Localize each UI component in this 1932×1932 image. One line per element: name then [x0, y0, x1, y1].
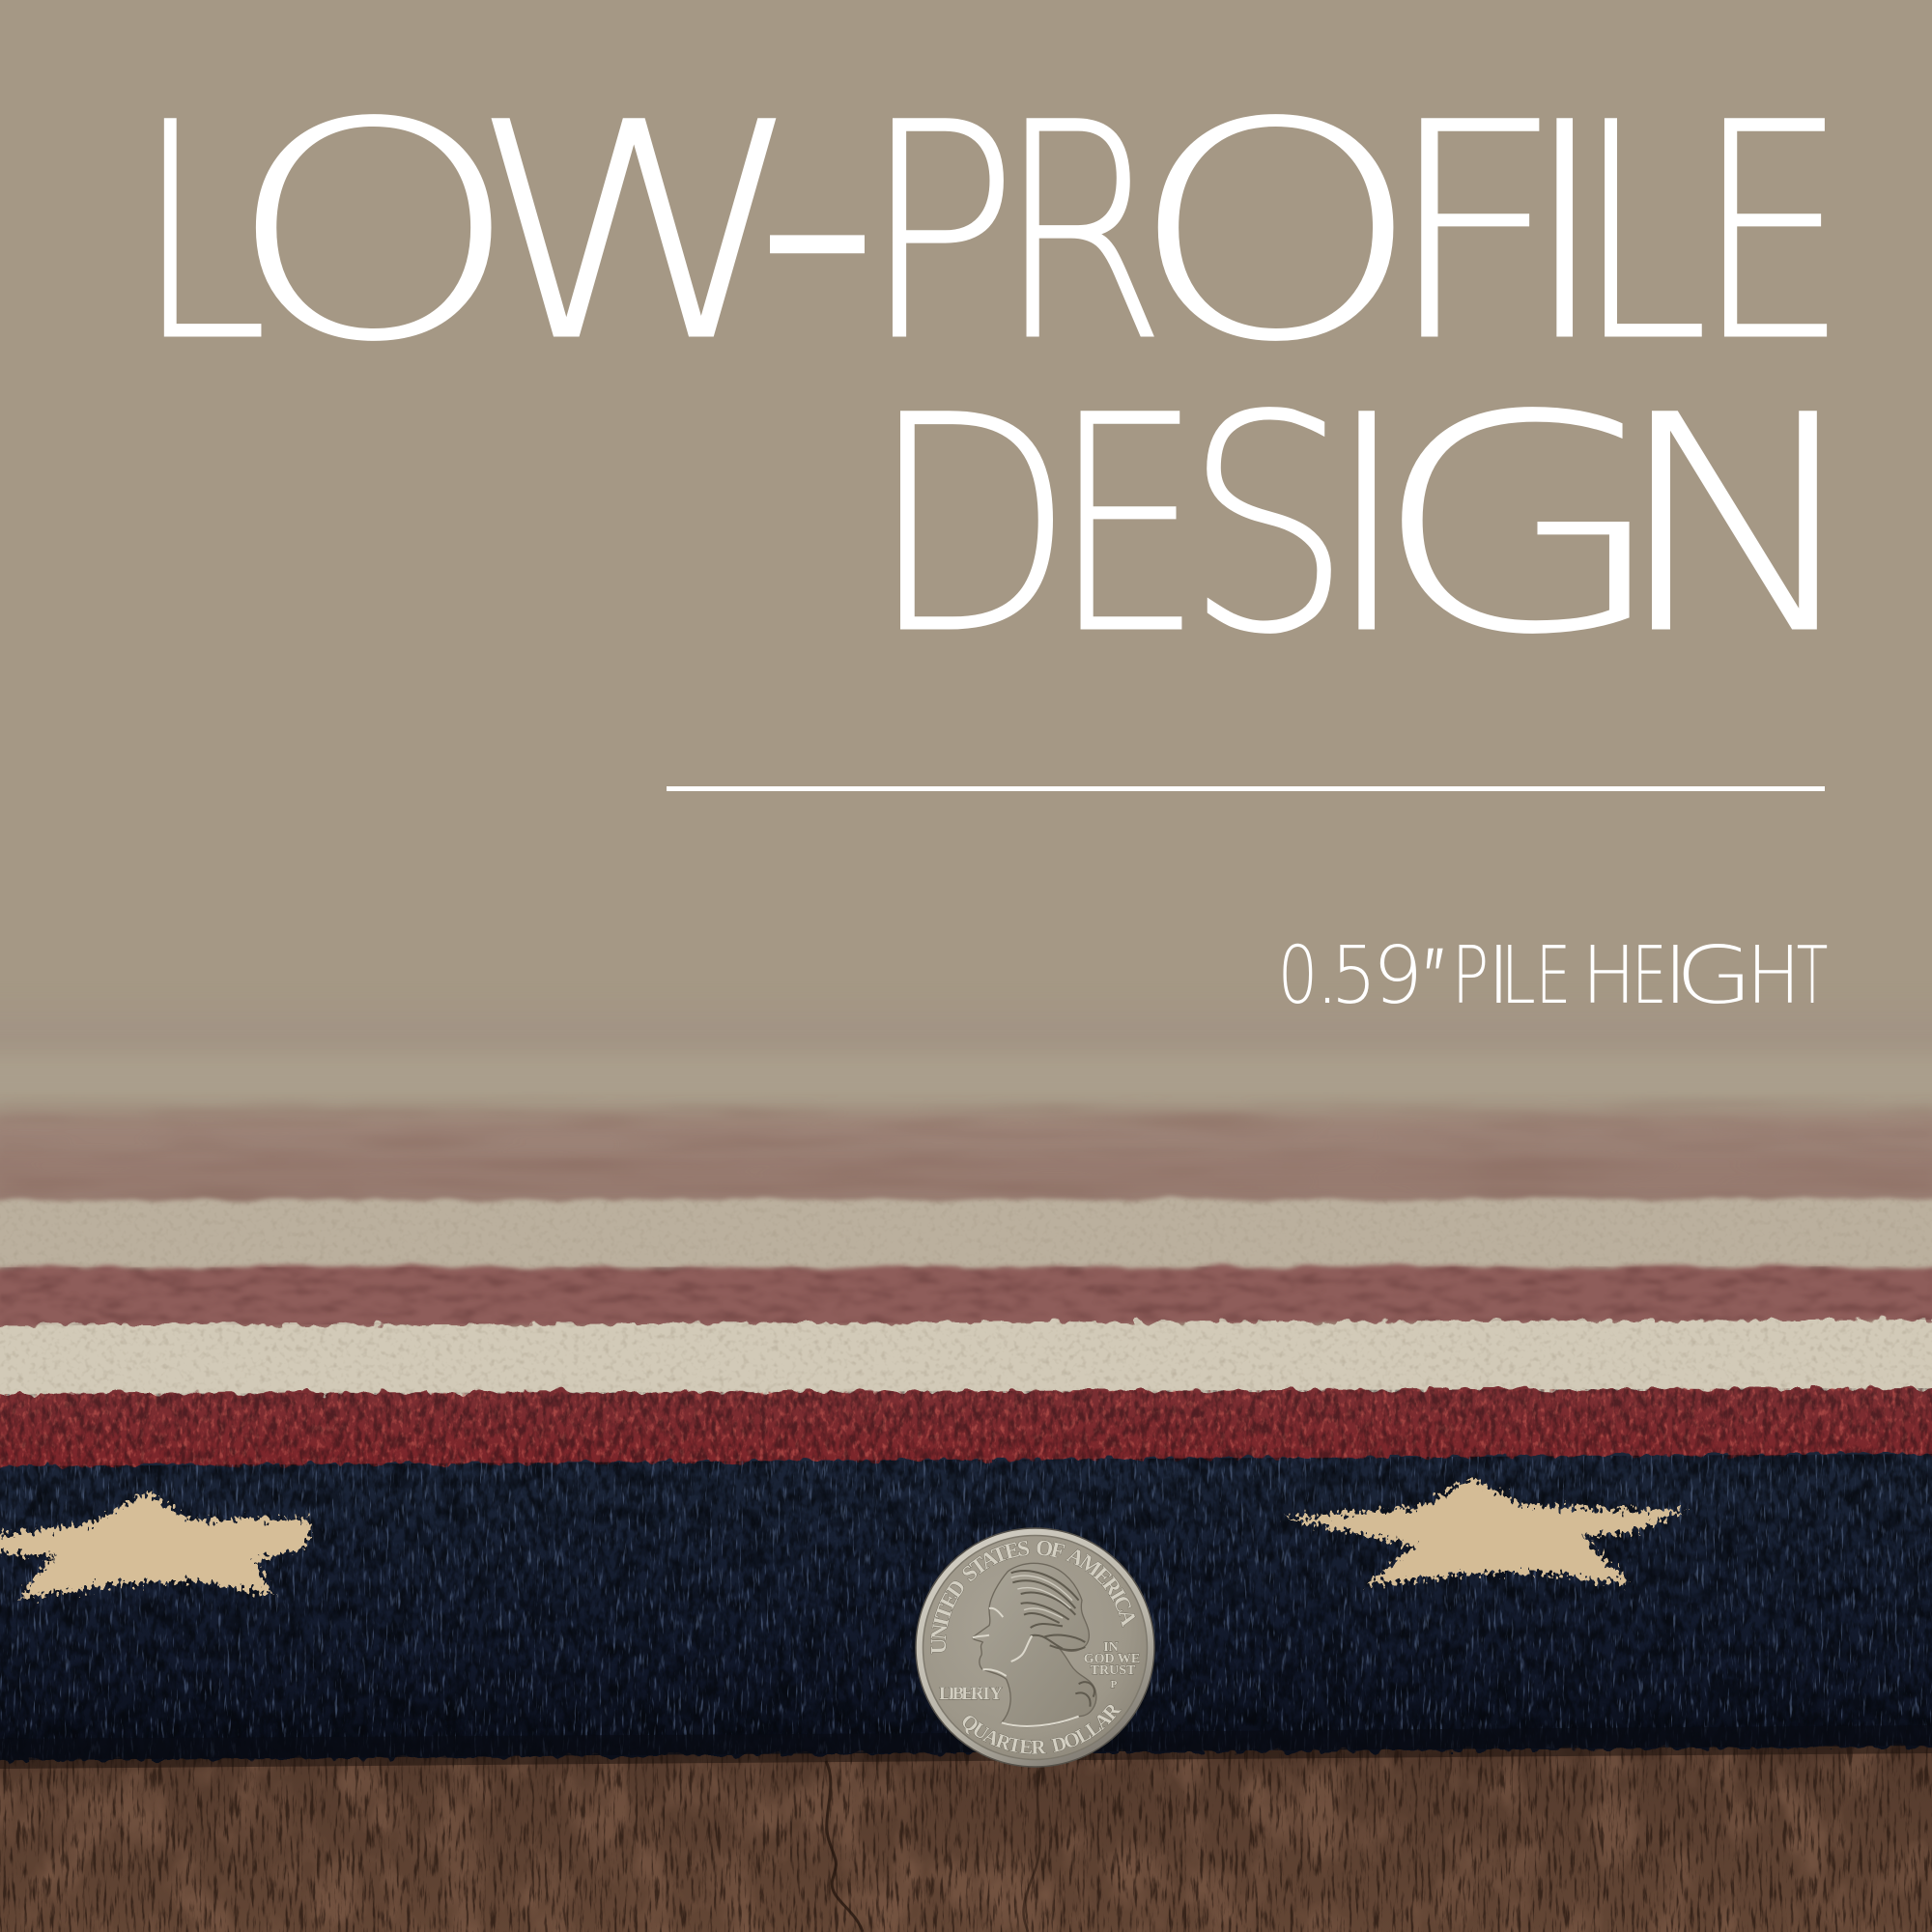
coin text motto: P: [1111, 1679, 1118, 1690]
title line 1: E: [1695, 60, 1848, 408]
rug photo: [0, 1014, 1932, 1932]
title line 1: O: [1128, 59, 1423, 407]
pile height caption: 0: [1278, 929, 1318, 1022]
coin text motto: IN: [1103, 1640, 1119, 1655]
coin rim: [916, 1528, 1154, 1767]
pile height caption: E: [1536, 929, 1571, 1022]
pile height caption: [1278, 929, 1828, 1022]
cream stripe near: [0, 1320, 1932, 1397]
title line 2: N: [1610, 352, 1869, 699]
pile height caption: .: [1315, 930, 1340, 1022]
title line 2: S: [1183, 353, 1352, 699]
title line 1: F: [1383, 60, 1565, 408]
coin text motto: TRUST: [1091, 1663, 1136, 1678]
title line 1: P: [861, 59, 1019, 407]
pile height caption: E: [1632, 929, 1667, 1022]
rug bottom edge: [0, 1725, 1932, 1760]
title line 2: D: [868, 353, 1075, 700]
title line 2: I: [1322, 352, 1411, 699]
red stripe: [0, 1388, 1932, 1472]
stripe textures: [0, 1193, 1932, 1478]
pile height caption: H: [1747, 930, 1801, 1022]
pile height caption: I: [1487, 930, 1511, 1022]
title line 1: R: [997, 59, 1167, 407]
title line 1: [135, 0, 1848, 461]
star left: [0, 1492, 309, 1599]
quarter coin: [915, 1527, 1155, 1768]
title line 1: W: [469, 59, 808, 407]
pile height caption: I: [1663, 930, 1688, 1022]
title line 2: G: [1370, 353, 1670, 699]
title line 1: O: [226, 59, 522, 407]
coin text bottom: QUARTER DOLLAR: [962, 1704, 1122, 1754]
title line 2: E: [1052, 352, 1203, 699]
title line 2: [868, 352, 1869, 700]
blurred far stripes: [0, 1105, 1932, 1204]
pile height caption: 5: [1331, 930, 1377, 1022]
pile height caption: G: [1675, 930, 1753, 1022]
divider line: [667, 786, 1825, 791]
coin text liberty: LIBERTY: [939, 1684, 1003, 1704]
star right: [1283, 1477, 1687, 1584]
wood floor: [0, 1739, 1932, 1932]
coin text motto: [1084, 1640, 1140, 1690]
navy rug field: [0, 1454, 1932, 1761]
title line 1: I: [1520, 59, 1609, 407]
title: [135, 0, 1869, 700]
title line 1: L: [135, 59, 269, 407]
pile height caption: H: [1582, 930, 1635, 1022]
navy pile texture: [0, 1449, 1932, 1768]
coin text top: UNITED STATES OF AMERICA: [930, 1540, 1136, 1654]
washington portrait: [973, 1563, 1096, 1727]
rose stripe: [0, 1266, 1932, 1329]
pile height caption: L: [1500, 929, 1536, 1022]
pile height caption: ″: [1424, 929, 1444, 1022]
cream stripe far: [0, 1199, 1932, 1270]
coin text motto: GOD WE: [1084, 1652, 1140, 1666]
pile height caption: T: [1797, 930, 1828, 1022]
coin face: [923, 1536, 1148, 1760]
title line 1: L: [1576, 59, 1709, 407]
pile height caption: 9: [1373, 930, 1423, 1022]
pile height caption: P: [1452, 930, 1489, 1022]
